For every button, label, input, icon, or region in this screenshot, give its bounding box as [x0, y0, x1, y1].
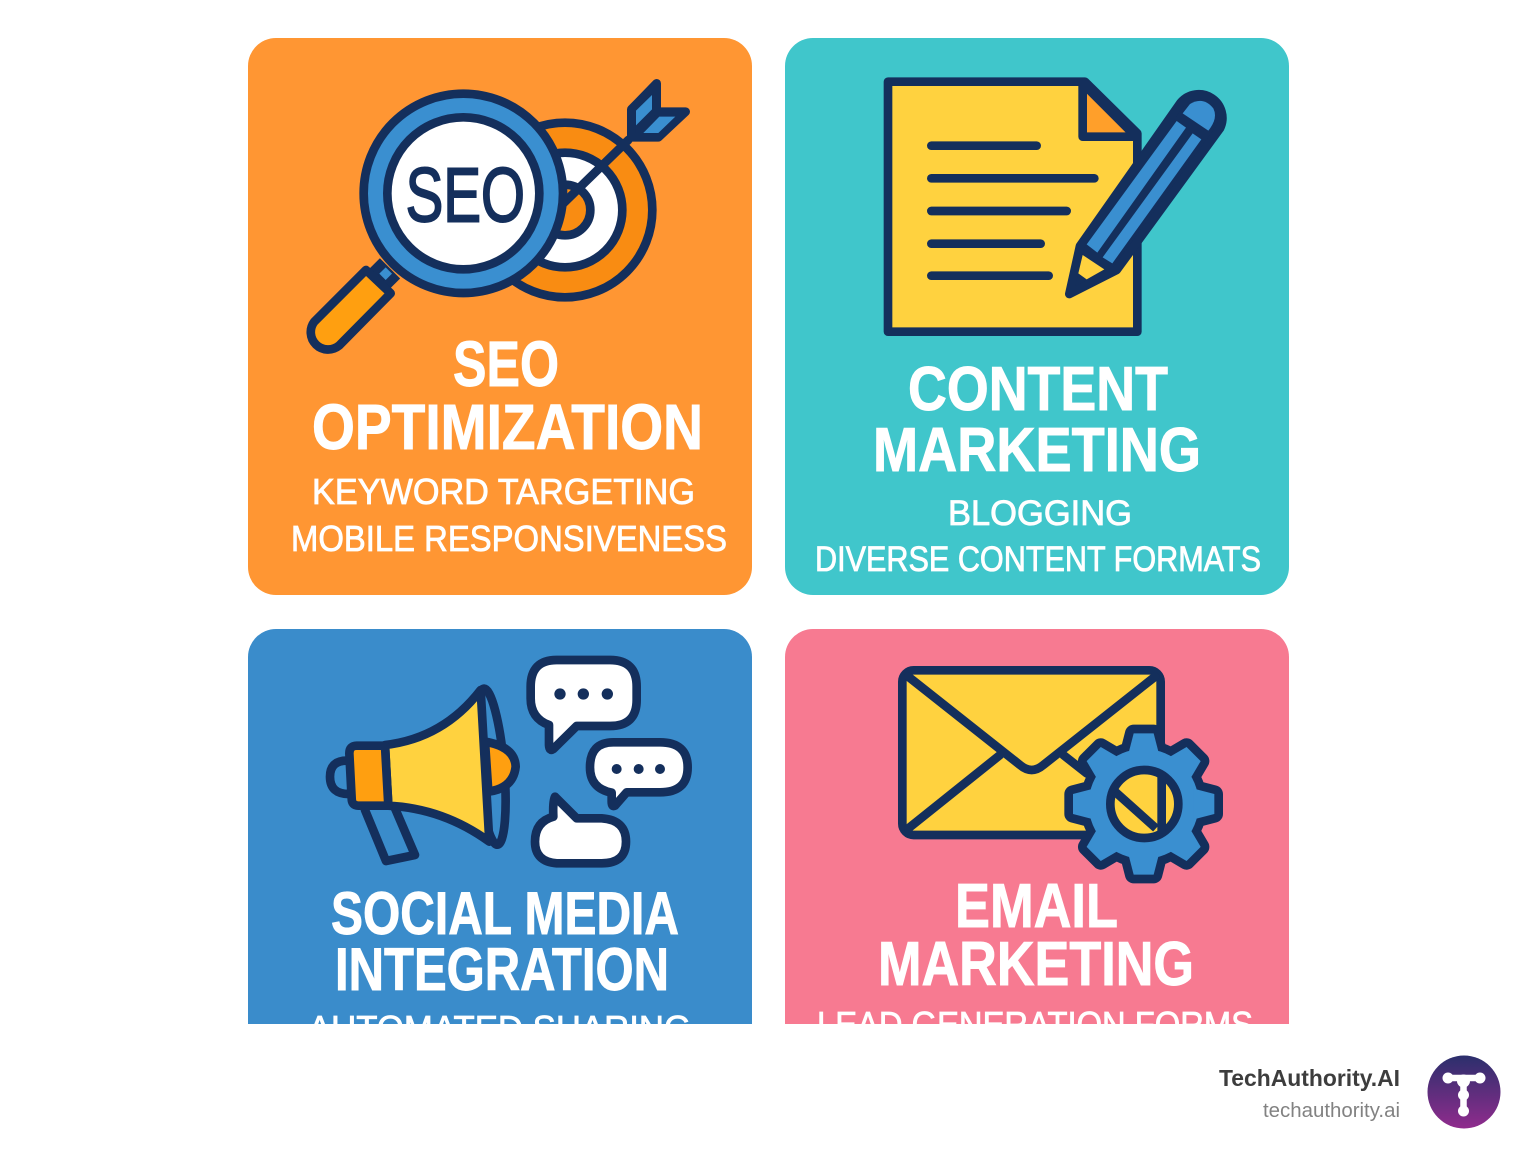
icon label: SEO: SEO — [406, 152, 525, 238]
heading: Social Media Integration: SOCIAL MEDIA — [331, 880, 679, 947]
text: SEO features: KEYWORD TARGETING — [312, 471, 695, 512]
infographic canvas — [248, 38, 1500, 1128]
heading: SEO Optimization — [312, 328, 703, 463]
heading: Email Marketing: MARKETING — [878, 930, 1194, 999]
text: content features: DIVERSE CONTENT FORMATS — [815, 540, 1261, 579]
icon: envelope and gear — [902, 670, 1214, 875]
panel: SEO optimization — [248, 38, 752, 595]
text: SEO features — [291, 471, 727, 559]
heading: Social Media Integration — [332, 891, 678, 991]
icon: document and pencil — [888, 82, 1222, 332]
heading: Content Marketing — [873, 355, 1201, 485]
text: SEO features: MOBILE RESPONSIVENESS — [291, 518, 727, 559]
text: content features — [815, 494, 1261, 579]
heading: Content Marketing: CONTENT — [908, 355, 1168, 424]
heading: Social Media Integration: INTEGRATION — [335, 936, 669, 1003]
brand url: techauthority.ai — [1263, 1100, 1400, 1122]
text: content features: BLOGGING — [948, 494, 1132, 533]
icon: megaphone and speech bubbles — [330, 660, 688, 863]
brand name: TechAuthority.AI — [1219, 1065, 1400, 1091]
icon: magnifying glass and target — [311, 83, 686, 350]
heading: Email Marketing — [881, 884, 1192, 986]
heading: Email Marketing: EMAIL — [955, 872, 1118, 941]
icon: TechAuthority logo — [1428, 1056, 1500, 1128]
panel: content marketing — [785, 38, 1289, 595]
heading: Content Marketing: MARKETING — [873, 416, 1201, 485]
panel: social media integration — [248, 629, 752, 1024]
heading: SEO Optimization: SEO — [453, 328, 559, 400]
text: email feature, cropped: LEAD GENERATION FORMS — [817, 1004, 1253, 1045]
text: social feature, cropped: AUTOMATED SHARING — [308, 1008, 691, 1049]
panel: email marketing — [785, 629, 1289, 1024]
heading: SEO Optimization: OPTIMIZATION — [312, 391, 703, 463]
